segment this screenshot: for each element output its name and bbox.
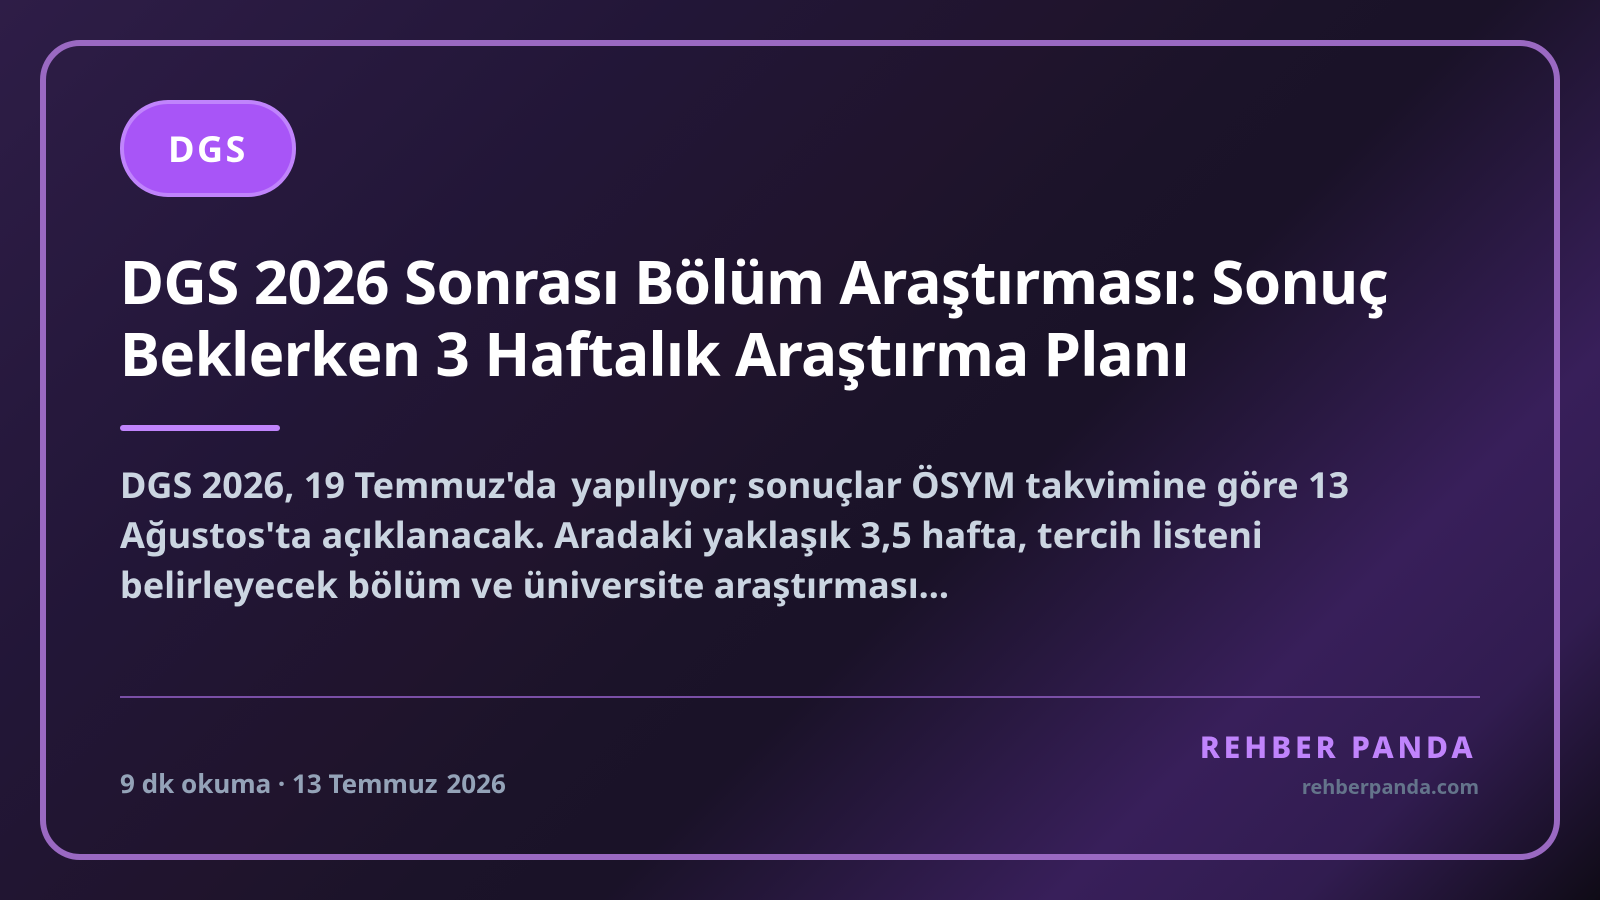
title: DGS 2026 Sonrası Bölüm Araştırması: Sonuç xyxy=(120,240,1388,322)
summary text xyxy=(120,460,1349,609)
brand name: REHBER PANDA xyxy=(1200,726,1476,767)
accent divider xyxy=(120,425,280,431)
summary text: belirleyecek bölüm ve üniversite araştırması... xyxy=(120,560,949,609)
category badge: DGS xyxy=(168,124,248,173)
summary text: Ağustos'ta açıklanacak. Aradaki yaklaşık 3,5 hafta, tercih listeni xyxy=(120,510,1263,559)
category badge xyxy=(120,100,296,197)
reading time and date: 9 dk okuma · 13 Temmuz 2026 xyxy=(120,765,506,801)
title: Beklerken 3 Haftalık Araştırma Planı xyxy=(120,312,1189,394)
footer rule xyxy=(120,696,1480,698)
summary text: DGS 2026, 19 Temmuz'da yapılıyor; sonuçlar ÖSYM takvimine göre 13 xyxy=(120,460,1349,509)
title xyxy=(120,240,1388,394)
website: rehberpanda.com xyxy=(1302,773,1479,800)
